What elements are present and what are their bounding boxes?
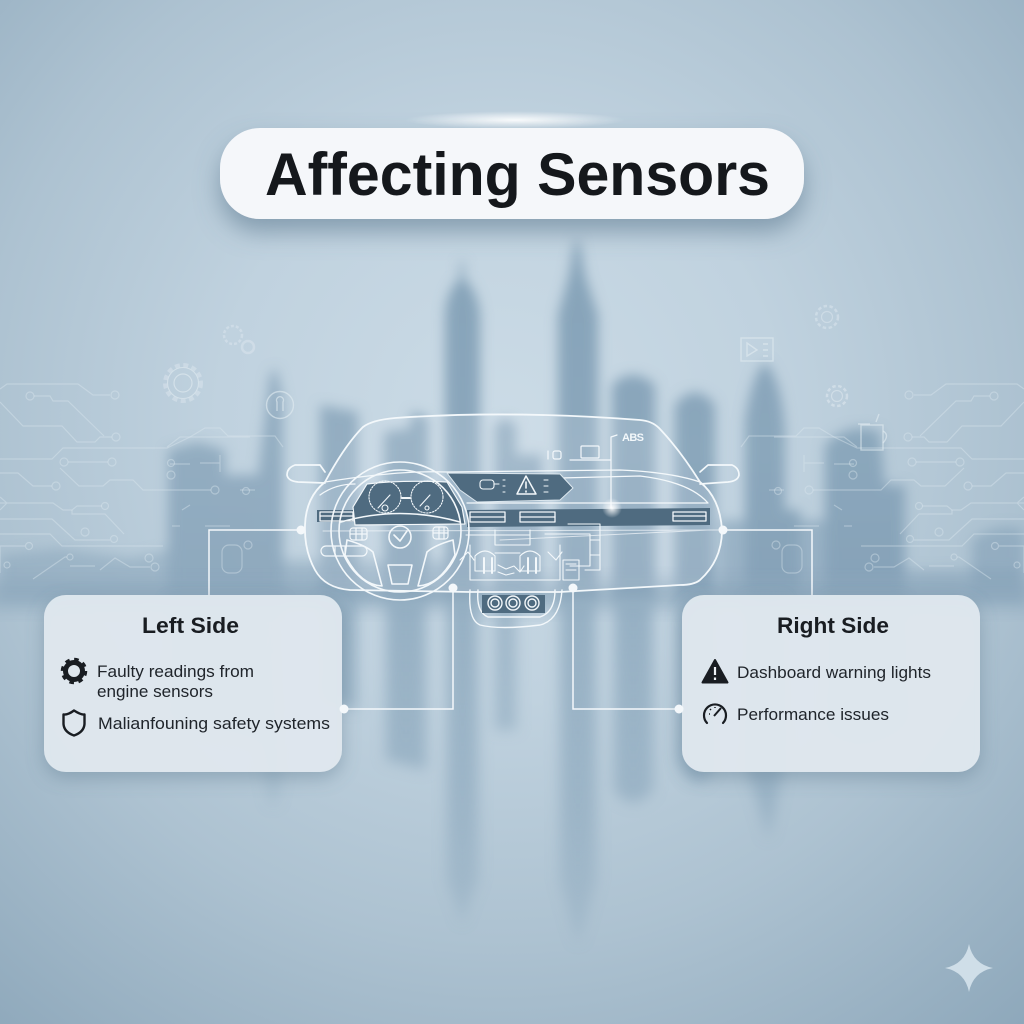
gauges <box>369 481 443 513</box>
icon: gauge <box>704 704 726 723</box>
horizon haze <box>0 580 1024 608</box>
steering wheel <box>331 462 469 600</box>
circuit pattern: left <box>0 384 283 579</box>
display warning icons <box>480 476 548 494</box>
icon: shield <box>64 710 84 736</box>
panel: left side <box>44 595 342 772</box>
sensor beacon lines <box>548 435 617 508</box>
right panel connector node <box>674 704 684 714</box>
left dark vent <box>317 510 353 522</box>
vent band <box>467 508 710 527</box>
floating tech icons <box>165 306 886 450</box>
dash mid line <box>323 530 720 540</box>
lower console <box>470 590 562 628</box>
icon: sparkle watermark <box>945 944 993 992</box>
item text: performance: Performance issues <box>737 705 889 724</box>
knobs <box>488 596 539 610</box>
dashboard body outline <box>305 414 722 592</box>
icon: lock badge <box>266 392 294 418</box>
icon: small gears left <box>224 326 254 353</box>
item text: faulty readings: Faulty readings from <box>97 662 254 681</box>
dark center display <box>447 473 573 502</box>
air vents <box>320 512 706 522</box>
title pill <box>220 128 804 219</box>
panel heading: right side: Right Side <box>777 613 889 638</box>
steering hub <box>389 526 411 548</box>
item text: safety systems: Malianfouning safety systems <box>98 714 330 733</box>
dark instrument cluster <box>353 481 465 525</box>
city reflection <box>168 600 905 945</box>
icon: gear <box>62 660 86 682</box>
wheel buttons <box>321 527 448 556</box>
climate knobs <box>482 595 545 613</box>
engine and center console detail <box>460 524 600 580</box>
icon: module box <box>858 414 886 450</box>
icon: video frame <box>741 338 773 361</box>
title glow <box>405 111 625 129</box>
sensor label: ABS <box>622 432 644 444</box>
circuit pattern: right <box>741 384 1024 579</box>
icon: gear right <box>827 386 847 406</box>
item text: warning lights: Dashboard warning lights <box>737 663 931 682</box>
icon: gear right top <box>816 306 838 328</box>
panel: right side <box>682 595 980 772</box>
panel heading: left side: Left Side <box>142 613 239 638</box>
connector nodes <box>296 526 728 592</box>
left panel connector node <box>340 704 348 714</box>
beacon glow <box>602 498 622 518</box>
item text: faulty readings: engine sensors <box>97 682 213 701</box>
connector lines <box>209 530 812 709</box>
icon: large gear left <box>165 365 201 401</box>
icon: warning triangle <box>702 660 728 682</box>
car dashboard illustration <box>287 414 739 628</box>
dash top lines <box>320 470 708 503</box>
city skyline <box>0 240 1024 600</box>
side mirrors <box>287 465 739 484</box>
title text: Affecting Sensors <box>265 141 770 208</box>
